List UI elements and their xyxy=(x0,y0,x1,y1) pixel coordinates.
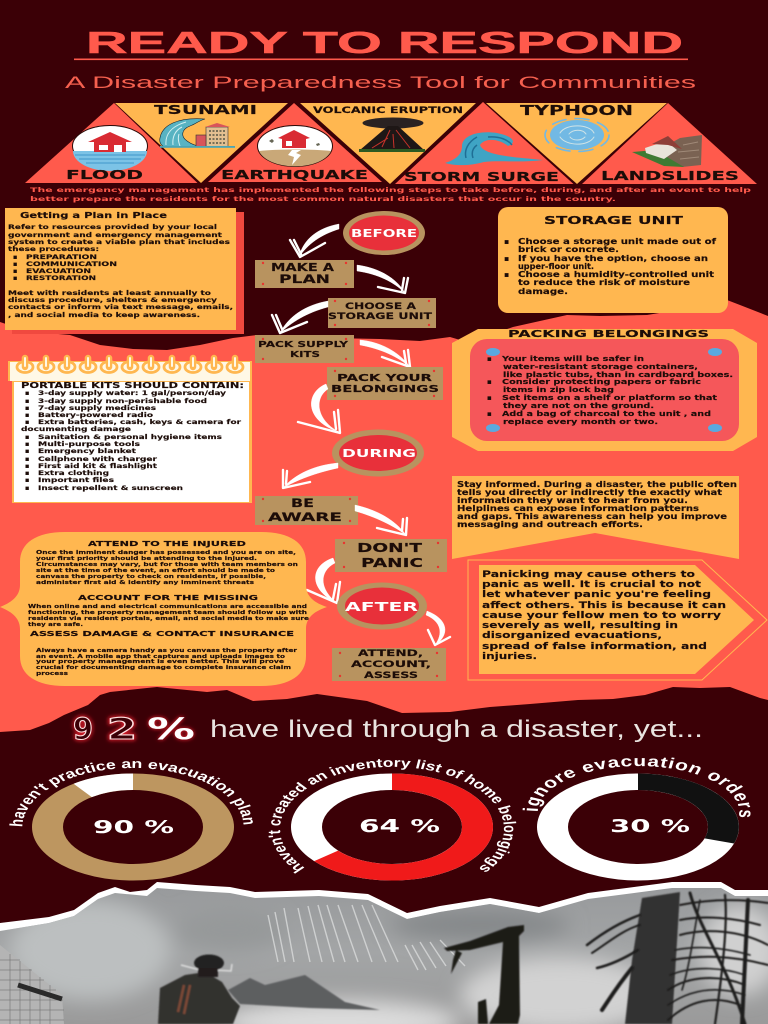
corrugated roof xyxy=(268,905,465,970)
flow: choose a storage unit: CHOOSE A xyxy=(345,302,416,312)
text: attend to the injured: site at the time of the event, an effort should be made to xyxy=(36,568,275,574)
text: plan body: EVACUATION xyxy=(26,267,91,275)
triangle: volcanic eruption: VOLCANIC ERUPTION xyxy=(313,106,463,116)
triangle: earthquake: EARTHQUAKE xyxy=(221,167,368,182)
text: plan body: Refer to resources provided by your local xyxy=(8,223,217,231)
text: account for the missing: When online and and electrical communications are accessible and xyxy=(28,604,307,610)
intro text xyxy=(30,186,752,203)
text: assess damage xyxy=(30,630,297,677)
text: kit list: Sanitation & personal hygiene items xyxy=(38,433,222,441)
panel: portable kits notepad xyxy=(8,358,252,503)
text: kit list: ▪ xyxy=(25,440,29,448)
flow: attend account assess: ACCOUNT, xyxy=(351,660,431,670)
triangle: landslides: LANDSLIDES xyxy=(601,168,739,183)
heading: packing belongings: PACKING BELONGINGS xyxy=(508,329,709,340)
intro text: The emergency management has implemented the following steps to take before, during, and after an event to help xyxy=(30,186,752,194)
stat headline: 92 percent: 2 xyxy=(107,712,137,746)
text: kit list: Important files xyxy=(38,476,114,484)
triangle: flood xyxy=(25,103,198,183)
text: storage tips: upper-floor unit. xyxy=(518,262,594,271)
text: packing tips: Add a bag of charcoal to the unit , and xyxy=(502,410,711,418)
text: account for the missing: ACCOUNT FOR THE MISSING xyxy=(78,594,258,602)
text: packing tips: they are not on the ground. xyxy=(503,402,654,410)
text: attend to the injured xyxy=(36,540,298,586)
text: assess damage: process xyxy=(36,671,69,677)
text: kit list: ▪ xyxy=(25,455,29,463)
corner dots xyxy=(486,348,722,432)
photo: firefighter in smoke xyxy=(0,880,768,1024)
triangle: storm surge xyxy=(395,102,574,184)
callout: panicking: disorganized evacuations, xyxy=(482,631,662,641)
triangle: tsunami: TSUNAMI xyxy=(154,102,257,117)
title: READY TO RESPOND xyxy=(86,25,683,60)
triangle: typhoon: TYPHOON xyxy=(520,103,633,119)
flow: be aware: BE xyxy=(291,496,314,510)
text: kit list: documenting damage xyxy=(21,425,132,433)
text: account for the missing xyxy=(28,594,309,628)
triangle: tsunami xyxy=(115,102,288,183)
text: plan body xyxy=(8,223,233,319)
text: plan body: RESTORATION xyxy=(26,274,96,282)
panel: getting a plan in place xyxy=(5,208,244,334)
triangle: earthquake xyxy=(208,103,382,182)
callout: stay informed: information they want to hear from you. xyxy=(457,496,688,505)
arrow: don't panic to after xyxy=(307,558,340,603)
text: storage tips: If you have the option, choose an xyxy=(518,254,708,263)
donut chart: evacuation plan: 90 % xyxy=(93,818,174,838)
text: attend to the injured: Once the imminent danger has possessed and you are on site, xyxy=(36,550,296,556)
house mesh xyxy=(0,945,64,1024)
text: kit list: Battery-powered radio xyxy=(38,411,154,419)
stat headline: 92 percent: % xyxy=(147,712,195,746)
flow: don't panic: PANIC xyxy=(361,555,423,570)
arrow: storage unit to supply kits xyxy=(272,301,328,333)
flow: after badge: AFTER xyxy=(345,600,418,614)
text: plan body: , and social media to keep awareness. xyxy=(8,311,200,319)
text: packing tips: replace every month or two. xyxy=(503,418,658,426)
flow: choose a storage unit xyxy=(328,298,436,328)
text: storage tips: ▪ xyxy=(504,254,509,263)
text: kit list: ▪ xyxy=(25,411,29,419)
flow: pack supply kits: PACK SUPPLY xyxy=(258,340,348,349)
stat headline: 92 percent: 9 xyxy=(73,712,93,746)
stat headline: 92 percent xyxy=(73,712,703,746)
stat headline: 92 percent: 2 xyxy=(107,712,137,746)
donut chart: evacuation orders: 30 % xyxy=(610,817,690,837)
callout: panicking: cause your fellow men to to worry xyxy=(482,611,721,621)
flow: before badge: BEFORE xyxy=(351,227,417,240)
smoke xyxy=(10,900,768,1024)
donut chart: evacuation orders xyxy=(522,758,751,880)
flow: attend account assess: ATTEND, xyxy=(358,649,423,659)
text: storage tips xyxy=(504,237,717,296)
stat headline: 92 percent: % xyxy=(147,712,195,746)
text: attend to the injured: ATTEND TO THE INJURED xyxy=(88,540,246,548)
text: assess damage: your property management is even better. This will prove xyxy=(36,659,284,665)
text: attend to the injured: canvass the property to check on residents, if possible, xyxy=(36,574,266,580)
flow: after badge xyxy=(337,582,427,630)
donut chart: evacuation plan: haven't practice an evacuation plan xyxy=(9,761,253,826)
heading: portable kits: PORTABLE KITS SHOULD CONTAIN: xyxy=(21,381,244,390)
text: kit list: ▪ xyxy=(25,418,29,426)
text: account for the missing: they are safe. xyxy=(28,622,83,628)
callout: panicking: injuries. xyxy=(482,652,537,662)
heading: plan: Getting a Plan in Place xyxy=(20,211,167,220)
donut chart: evacuation orders: ignore evacuation orders xyxy=(522,758,751,818)
text: storage tips: ▪ xyxy=(504,237,509,246)
text: plan body: government and emergency management xyxy=(8,231,222,239)
text: storage tips: to reduce the risk of moisture xyxy=(518,278,690,287)
tall post xyxy=(625,892,680,1024)
flow: be aware xyxy=(255,496,358,525)
callout: stay informed: messaging and outreach efforts. xyxy=(457,520,643,529)
text: kit list: First aid kit & flashlight xyxy=(38,462,157,470)
triangle: landslides xyxy=(582,103,757,184)
flow: pack your belongings: BELONGINGS xyxy=(331,384,439,395)
text: packing tips: ▪ xyxy=(487,410,492,418)
flow: make a plan: MAKE A xyxy=(271,262,335,274)
text: attend to the injured: administer first aid & identify any imminent threats xyxy=(36,580,255,586)
arrow: supply kits to belongings xyxy=(360,340,410,367)
text: kit list: ▪ xyxy=(25,484,29,492)
coral torn middle band xyxy=(0,300,768,732)
arrow: during to be aware xyxy=(283,463,338,488)
donut chart: evacuation plan xyxy=(9,761,253,880)
text: kit list: ▪ xyxy=(25,462,29,470)
subtitle: A Disaster Preparedness Tool for Communities xyxy=(65,73,696,92)
text: kit list: ▪ xyxy=(25,404,29,412)
callout: stay informed: Helplines can expose information patterns xyxy=(457,504,700,513)
arrow: make a plan to storage unit xyxy=(357,265,408,293)
text: plan body: ▪ xyxy=(13,253,17,261)
stat headline: 92 percent: 9 xyxy=(73,712,93,746)
text: plan body: system to create a viable plan that includes xyxy=(8,238,230,246)
text: plan body: these procedures: xyxy=(8,245,99,253)
flow: attend account assess: ASSESS xyxy=(364,671,418,681)
text: plan body: contacts or inform via text message, emails, xyxy=(8,303,233,311)
text: plan body: Meet with residents at least annually to xyxy=(8,289,212,297)
text: plan body: ▪ xyxy=(13,274,17,282)
flow: be aware: AWARE xyxy=(268,510,342,524)
callout: panicking: affect others. This is because it can xyxy=(482,601,726,611)
text: packing tips: Consider protecting papers or fabric xyxy=(502,378,701,386)
flow: choose a storage unit: STORAGE UNIT xyxy=(328,312,433,322)
text: attend to the injured: Circumstances may vary, but for those with team members on xyxy=(36,562,298,568)
flow: before badge xyxy=(343,211,425,255)
text: packing tips: water-resistant storage containers, xyxy=(503,363,698,371)
flow: don't panic: DON'T xyxy=(357,540,423,555)
text: packing tips: Set items on a shelf or platform so that xyxy=(502,394,718,402)
text: kit list: 3-day supply non-perishable food xyxy=(38,397,207,405)
text: assess damage: Always have a camera handy as you canvass the property after xyxy=(36,648,297,654)
flow: pack supply kits: KITS xyxy=(290,350,320,359)
text: packing tips: like plastic tubs, than in cardboard boxes. xyxy=(503,371,733,379)
text: assess damage: an event. A mobile app that captures and uploads images to xyxy=(36,654,285,660)
flow: pack your belongings xyxy=(327,367,443,400)
text: plan body: discuss procedure, shelters & emergency xyxy=(8,296,218,304)
text: packing tips: ▪ xyxy=(487,378,492,386)
arrow: belongings to during xyxy=(298,384,340,433)
callout: panicking: severely as well, resulting in xyxy=(482,621,678,631)
rubble xyxy=(228,975,380,1010)
text: kit list xyxy=(21,389,242,492)
donut chart: inventory list: haven't created an inventory list of home belongings xyxy=(268,759,516,874)
text: packing tips: ▪ xyxy=(487,355,492,363)
firefighter xyxy=(158,954,240,1024)
palm fronds xyxy=(587,893,768,1024)
text: packing tips: Your items will be safer in xyxy=(501,355,644,363)
flow: don't panic xyxy=(335,539,447,572)
text: kit list: ▪ xyxy=(25,433,29,441)
flow: make a plan: PLAN xyxy=(279,272,330,286)
text: plan body: COMMUNICATION xyxy=(26,260,117,268)
text: kit list: Emergency blanket xyxy=(38,447,136,455)
text: storage tips: Choose a storage unit made out of xyxy=(518,237,717,246)
text: plan body: ▪ xyxy=(13,267,17,275)
callout: stay informed xyxy=(452,476,739,559)
flow: pack supply kits xyxy=(255,335,354,363)
text: assess damage: crucial for documenting damage to complete insurance claim xyxy=(36,665,291,671)
flow: during badge: DURING xyxy=(342,447,416,460)
text: kit list: ▪ xyxy=(25,469,29,477)
arrow: after to attend xyxy=(426,611,450,645)
text: kit list: Multi-purpose tools xyxy=(38,440,140,448)
flow: attend account assess xyxy=(332,648,446,681)
text: kit list: ▪ xyxy=(25,389,29,397)
text: attend to the injured: your first priority should be attending to the injured. xyxy=(36,556,257,562)
stat headline: 92 percent: have lived through a disaster, yet... xyxy=(210,716,703,743)
text: kit list: ▪ xyxy=(25,447,29,455)
donut chart: inventory list: 64 % xyxy=(359,817,440,837)
arrow: be aware to don't panic xyxy=(355,505,407,535)
panel: packing belongings xyxy=(452,329,757,451)
text: account for the missing: residents via resident portals, email, and social media to make sure xyxy=(28,616,309,622)
callout: stay informed: and gaps. This awareness can help you improve xyxy=(457,512,727,521)
panel: after actions xyxy=(0,532,327,686)
flow: make a plan xyxy=(255,260,354,288)
text: assess damage: ASSESS DAMAGE & CONTACT INSURANCE xyxy=(30,630,294,638)
callout: panicking xyxy=(468,560,767,680)
callout: panicking: let whatever panic you're feeling xyxy=(482,590,711,600)
callout: stay informed: tells you directly or indirectly the exactly what xyxy=(457,488,723,497)
torn white edge xyxy=(0,882,768,1024)
triangle: typhoon xyxy=(486,103,667,184)
text: packing tips xyxy=(487,355,733,426)
text: account for the missing: functioning, the property management team should follow up with xyxy=(28,610,307,616)
text: kit list: 7-day supply medicines xyxy=(38,404,156,412)
broken pole xyxy=(444,925,524,1024)
callout: panicking: spread of false information, and xyxy=(482,642,707,652)
text: kit list: Extra clothing xyxy=(38,469,109,477)
callout: panicking: panic as well. It is crucial to not xyxy=(482,580,702,590)
notepad rings xyxy=(17,358,243,372)
text: storage tips: Choose a humidity-controlled unit xyxy=(518,270,715,279)
text: storage tips: ▪ xyxy=(504,270,509,279)
text: storage tips: brick or concrete. xyxy=(518,245,619,254)
text: packing tips: ▪ xyxy=(487,394,492,402)
text: storage tips: damage. xyxy=(518,287,568,296)
triangle: volcanic eruption xyxy=(300,103,476,184)
triangle: flood: FLOOD xyxy=(66,167,143,182)
text: packing tips: items in zip lock bag xyxy=(503,386,614,394)
text: kit list: ▪ xyxy=(25,397,29,405)
callout: stay informed: Stay informed. During a disaster, the public often xyxy=(457,480,737,489)
text: kit list: Insect repellent & sunscreen xyxy=(38,484,184,492)
text: kit list: 3-day supply water: 1 gal/person/day xyxy=(38,389,227,397)
text: kit list: Cellphone with charger xyxy=(38,455,158,463)
arrow: before to make a plan xyxy=(290,224,339,257)
panel: storage unit xyxy=(498,207,728,313)
triangle: storm surge: STORM SURGE xyxy=(404,169,559,184)
flow: pack your belongings: PACK YOUR xyxy=(337,373,432,384)
text: kit list: ▪ xyxy=(25,476,29,484)
callout: panicking: Panicking may cause others to xyxy=(482,570,695,580)
text: plan body: ▪ xyxy=(13,260,17,268)
disaster triangles xyxy=(25,102,757,184)
flow: during badge xyxy=(332,430,424,476)
heading: storage unit: STORAGE UNIT xyxy=(544,215,684,227)
intro text: better prepare the residents for the most common natural disasters that occur in the country. xyxy=(30,195,616,203)
text: plan body: PREPARATION xyxy=(26,253,97,261)
text: kit list: Extra batteries, cash, keys & camera for xyxy=(38,418,242,426)
